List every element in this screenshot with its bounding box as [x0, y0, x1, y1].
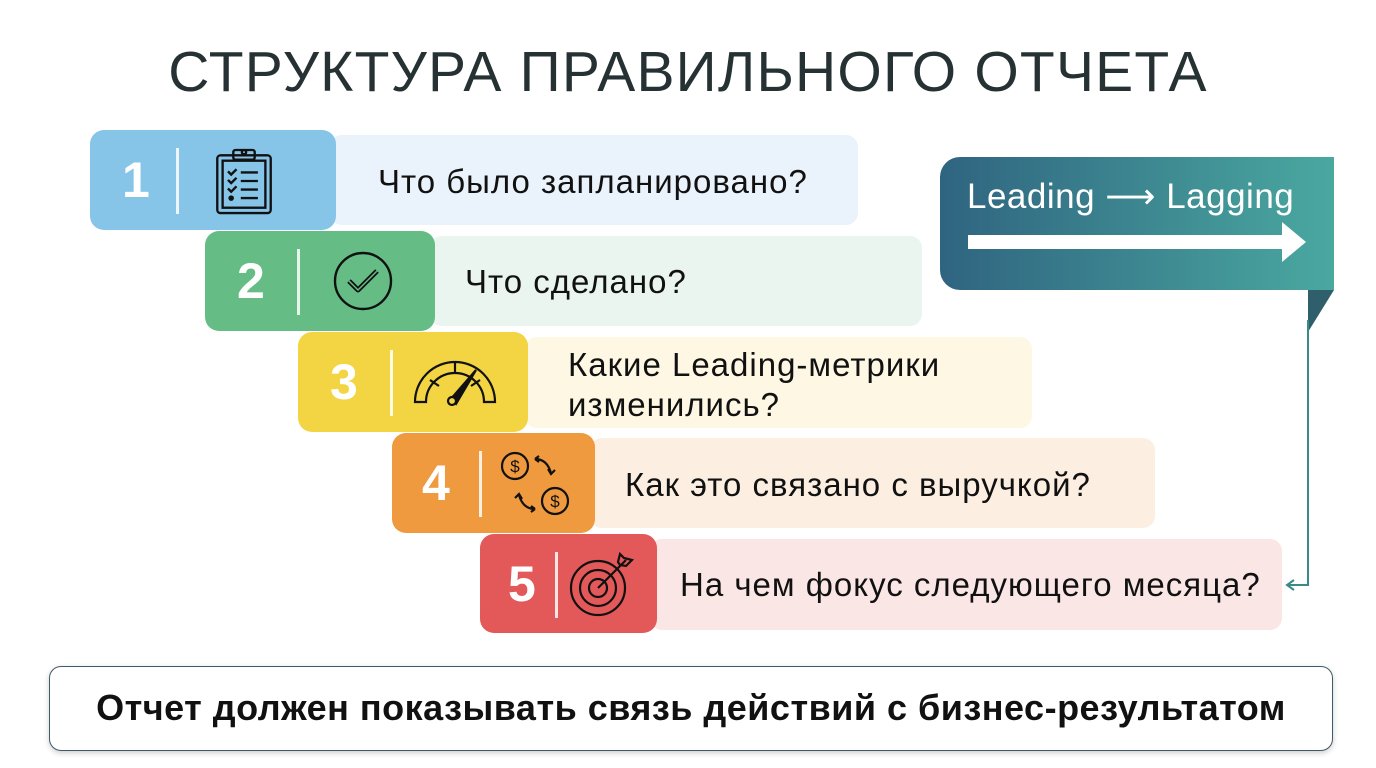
bottom callout: [49, 666, 1333, 751]
row 2 number badge: 2: [237, 253, 265, 309]
icon: clipboard: [216, 148, 272, 214]
arrow: connector to row 5: [1285, 320, 1309, 591]
row 1 question panel: [330, 135, 858, 225]
row 4 number badge: [392, 433, 595, 533]
row 3 text: [568, 346, 940, 423]
row 1: [90, 130, 858, 230]
icon: target: [570, 552, 634, 616]
icon: check circle: [334, 252, 392, 310]
row 1 text: Что было запланировано?: [378, 163, 808, 200]
row 2: [205, 231, 922, 331]
row 4 number badge: 4: [422, 455, 450, 511]
row 1 number badge: 1: [122, 152, 150, 208]
row 5 text: На чем фокус следующего месяца?: [680, 566, 1261, 603]
row 5 number badge: [480, 534, 657, 633]
icon: money exchange: $: [550, 492, 560, 511]
row 2 text: Что сделано?: [465, 263, 687, 300]
banner text: Leading ⟶ Lagging: [967, 177, 1294, 216]
row 3 text: изменились?: [568, 386, 780, 423]
row 3 question panel: [525, 337, 1032, 428]
row 2 number badge: [205, 231, 435, 331]
row 3 number badge: 3: [330, 354, 358, 410]
Leading to Lagging banner: [940, 157, 1334, 330]
row 4: [392, 433, 1155, 533]
row 3 text: Какие Leading-метрики: [568, 346, 940, 383]
row 4 question panel: [590, 438, 1155, 528]
bottom callout: Отчет должен показывать связь действий с бизнес-результатом: [96, 687, 1286, 728]
row 3: [298, 332, 1032, 432]
row 3 number badge: [298, 332, 528, 432]
row 5: [480, 534, 1282, 633]
icon: money exchange: [500, 452, 570, 516]
title: СТРУКТУРА ПРАВИЛЬНОГО ОТЧЕТА: [168, 40, 1208, 104]
row 5 number badge: 5: [508, 556, 536, 612]
row 4 text: Как это связано с выручкой?: [625, 466, 1091, 503]
row 1 number badge: [90, 130, 336, 230]
icon: money exchange: $: [510, 457, 520, 476]
icon: gauge: [414, 360, 496, 406]
row 5 question panel: [650, 539, 1282, 630]
row 2 question panel: [430, 236, 922, 326]
